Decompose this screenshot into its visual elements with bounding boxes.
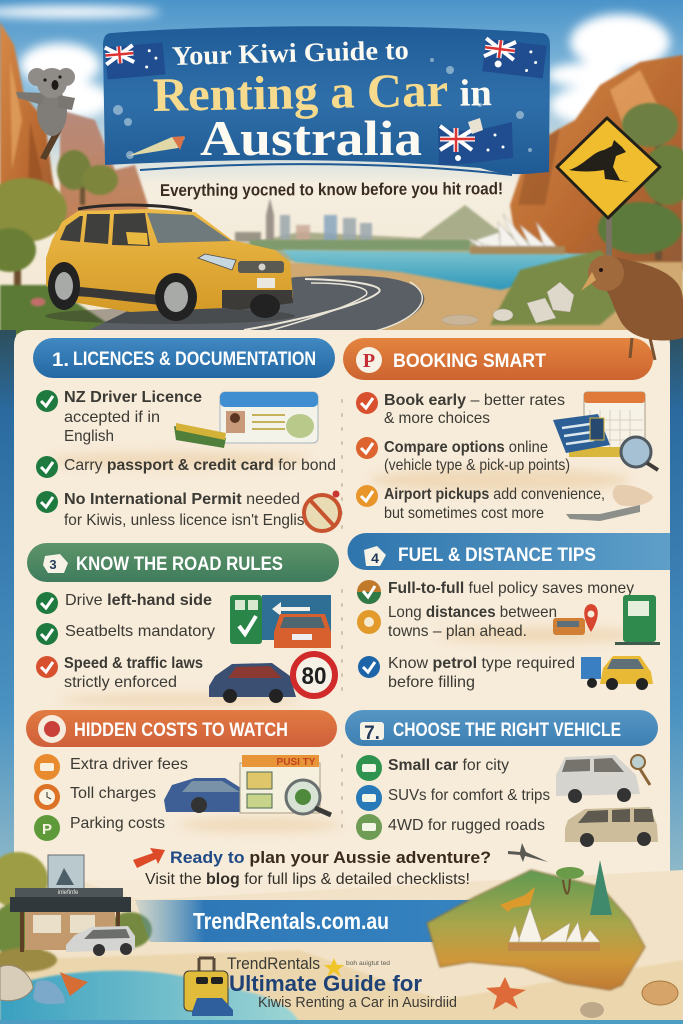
icon: starfish <box>486 977 526 1010</box>
icon: koala <box>16 68 75 160</box>
text: airport pickups: Airport pickups add convenience, <box>384 486 605 503</box>
heading: CHOOSE THE RIGHT VEHICLE <box>393 720 621 741</box>
text: long distances: Long distances between <box>388 604 557 621</box>
icon: rental station <box>10 855 131 952</box>
icon: no permit stamp <box>304 490 340 531</box>
heading: P <box>363 350 375 372</box>
right trees and shrubs <box>490 103 683 325</box>
heading: 3 <box>49 557 57 572</box>
heading <box>343 338 653 380</box>
icon: fee board with magnifier: PUSI TY <box>277 757 316 768</box>
website banner: TrendRentals.com.au <box>193 908 389 934</box>
icon: bus, map pin and fuel pump <box>553 595 660 645</box>
text: small car: Small car for city <box>388 757 509 774</box>
icon: australia map with opera house <box>427 860 645 990</box>
panel: fuel and distance tips <box>348 533 670 691</box>
text: book early <box>384 392 565 427</box>
heading <box>348 533 670 570</box>
road <box>85 275 424 332</box>
icon: waving flag <box>438 118 513 165</box>
text: toll charges: Toll charges <box>70 785 156 802</box>
checklist item icons <box>36 390 58 513</box>
heading <box>27 543 339 582</box>
call to action <box>133 843 548 888</box>
heading <box>26 710 337 747</box>
text: 4WD: 4WD for rugged roads <box>388 817 545 834</box>
checklist item icons <box>356 392 378 507</box>
text: left-hand side: Drive left-hand side <box>65 592 212 609</box>
text: petrol type: Know petrol type required <box>388 655 575 672</box>
icon: kiwi bird <box>581 255 683 360</box>
icon: plane <box>566 485 653 521</box>
text: licence accepted: accepted if in <box>64 409 160 426</box>
icon: city skyline <box>235 198 372 242</box>
heading <box>345 710 658 746</box>
text: compare options <box>384 439 570 474</box>
icon: rental station: inlefinfe <box>58 890 79 896</box>
text: parking costs: Parking costs <box>70 815 165 832</box>
text: subtitle: Kiwis Renting a Car in Ausirdiid <box>258 994 457 1011</box>
heading: KNOW THE ROAD RULES <box>76 554 283 575</box>
wheels <box>48 262 80 310</box>
heading: 7. <box>364 723 380 744</box>
website banner <box>135 900 480 942</box>
icon: small plane <box>508 843 548 862</box>
text: compare options: Compare options online <box>384 439 548 456</box>
icon: star <box>324 958 344 977</box>
icon: suitcase <box>184 958 233 1016</box>
rocks <box>442 282 574 325</box>
text: permit <box>64 491 313 529</box>
text: licence accepted: NZ Driver Licence <box>64 389 202 406</box>
text: long distances: towns – plan ahead. <box>388 623 527 640</box>
icon: shells <box>0 965 88 1004</box>
heading: LICENCES & DOCUMENTATION <box>73 349 316 370</box>
panel: hidden costs to watch <box>26 710 337 841</box>
checklist item icons <box>357 580 381 678</box>
text: SUVs: SUVs for comfort & trips <box>388 787 550 804</box>
icon: left-hand drive road sign <box>230 595 331 648</box>
icon: silver van and magnifier <box>556 755 650 803</box>
icon: shell <box>580 981 678 1018</box>
clouds <box>0 6 670 125</box>
heading: HIDDEN COSTS TO WATCH <box>74 720 288 741</box>
text: compare options: (vehicle type & pick-up points) <box>384 457 570 474</box>
panel: licences and documentation <box>33 338 340 531</box>
foliage left <box>0 852 152 972</box>
icon: truck and taxi <box>581 656 653 690</box>
text: airport pickups: but sometimes cost more <box>384 505 544 522</box>
background scene: outback and coast <box>0 0 683 335</box>
sand smudges <box>50 452 640 832</box>
icon: dotted column divider <box>341 400 343 830</box>
icon: silver car <box>66 926 135 956</box>
text: seatbelts: Seatbelts mandatory <box>65 623 215 640</box>
text: speed laws: Speed & traffic laws <box>64 655 203 672</box>
icon: yellow rental SUV <box>45 205 295 324</box>
icon: red arrow <box>133 848 165 868</box>
icon: flag top right <box>482 38 547 79</box>
text: book early: & more choices <box>384 410 490 427</box>
text: petrol type: before filling <box>388 674 475 691</box>
green strip <box>250 240 470 250</box>
title line 3: Australia <box>200 110 422 166</box>
icon: beige 4WD <box>565 807 658 847</box>
icon: blue car with 80 speed sign: 80 <box>302 663 326 690</box>
text: speed laws: strictly enforced <box>64 674 177 691</box>
horizon land <box>215 205 600 262</box>
icon: calendar, booklet and magnifier <box>553 392 658 470</box>
title line 1: Your Kiwi Guide to <box>171 35 409 71</box>
text: small note: boh auigtut ted <box>346 961 390 967</box>
panel: know the road rules <box>27 543 339 703</box>
panel: choose the right vehicle <box>345 710 658 847</box>
sand <box>100 262 683 335</box>
text: airport pickups <box>384 486 605 522</box>
icons: cost badges <box>34 754 60 841</box>
text: long distances <box>388 604 557 640</box>
bottom shore scene <box>0 852 683 1024</box>
icon: opera house <box>467 214 565 254</box>
heading <box>33 338 335 378</box>
title line 2: Renting a Car in <box>152 63 492 122</box>
bottom guide block <box>184 954 457 1016</box>
heading: FUEL & DISTANCE TIPS <box>398 545 596 566</box>
title banner <box>103 26 550 175</box>
banner specks <box>113 58 532 159</box>
text: visit the blog: Visit the blog for full lips & detailed checklists! <box>145 871 470 888</box>
icon: comet <box>128 136 185 156</box>
text: licence accepted <box>64 389 202 445</box>
left cliffs <box>0 22 148 260</box>
left trees <box>0 150 118 335</box>
text: full-to-full: Full-to-full fuel policy saves money <box>388 580 634 597</box>
text: licence accepted: English <box>64 428 114 445</box>
text: passport: Carry passport & credit card for bond <box>64 457 336 474</box>
text: petrol type <box>388 655 575 691</box>
text: book early: Book early – better rates <box>384 392 565 409</box>
main cream panel <box>14 330 670 880</box>
text: extra driver fees: Extra driver fees <box>70 756 188 773</box>
icon: licence card and wallet <box>174 392 318 448</box>
sea <box>282 250 590 290</box>
heading: 4 <box>371 550 379 566</box>
text: brand: TrendRentals <box>227 954 320 973</box>
text: ready to plan: Ready to plan your Aussie adventure? <box>170 848 491 867</box>
panel: booking smart <box>343 338 658 522</box>
side textures <box>0 330 683 875</box>
tagline: Everything yocned to know before you hit road! <box>160 179 503 200</box>
right cliffs <box>510 55 683 270</box>
text: ultimate guide: Ultimate Guide for <box>229 971 422 996</box>
icons: vehicle badges <box>356 755 382 840</box>
heading: BOOKING SMART <box>393 351 546 372</box>
icon: flag top left <box>105 43 165 79</box>
heading: 1. <box>52 350 69 371</box>
icon: blue sedan <box>164 778 244 813</box>
icon: kangaroo road sign <box>557 118 660 258</box>
icons: cost badges: P <box>42 821 52 838</box>
icon: blue car with 80 speed sign <box>209 654 335 703</box>
text: permit: No International Permit needed <box>64 491 300 508</box>
icon: fee board with magnifier <box>240 755 331 815</box>
text: permit: for Kiwis, unless licence isn't English <box>64 512 313 529</box>
checklist item icons <box>36 592 58 678</box>
text: speed laws <box>64 655 203 691</box>
